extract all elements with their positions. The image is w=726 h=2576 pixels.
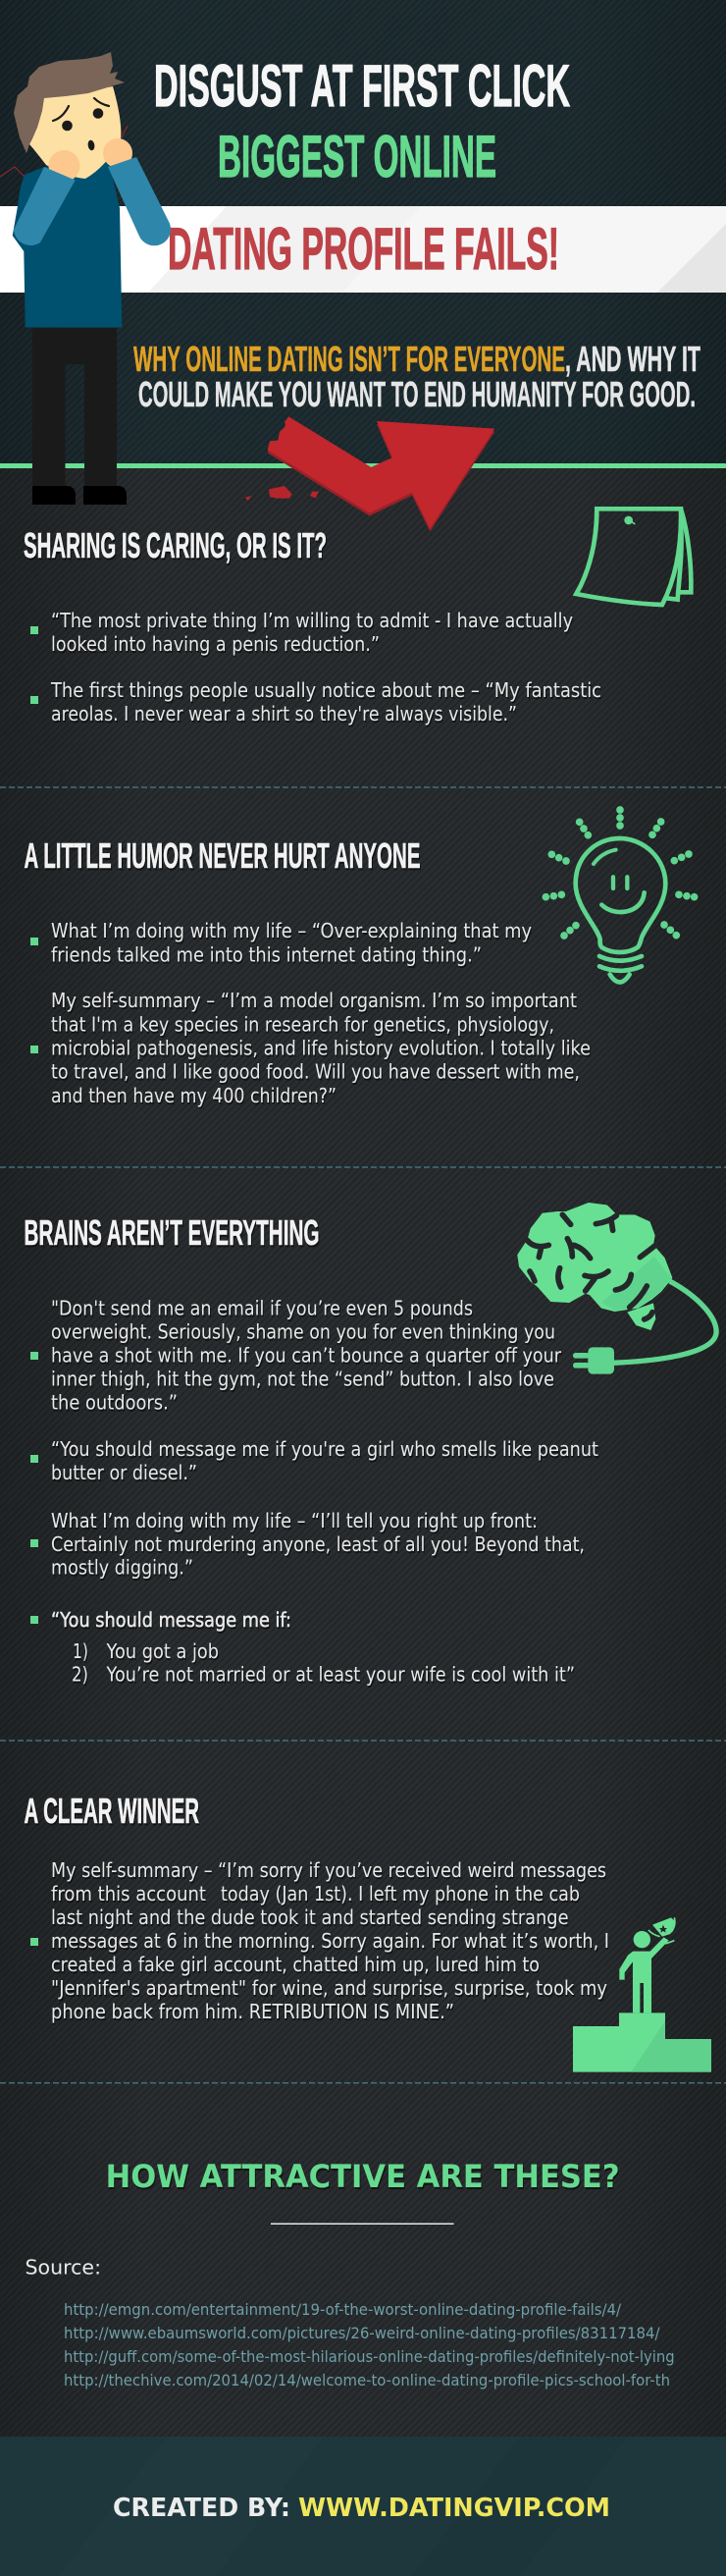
text: section one quotes: looked into having a penis reduction.” xyxy=(51,632,380,656)
text: section three quotes: butter or diesel.” xyxy=(51,1461,197,1484)
man: hands xyxy=(49,138,132,182)
icon: brain with plug xyxy=(518,1204,716,1374)
brain: plug xyxy=(573,1347,614,1374)
man: shoes xyxy=(32,486,127,505)
text: section three quotes: mostly digging.” xyxy=(51,1556,193,1580)
footer credit: CREATED BY: xyxy=(113,2494,290,2523)
man: torso xyxy=(13,157,122,328)
podium xyxy=(573,2012,711,2072)
heading: a little humor: A LITTLE HUMOR NEVER HURT ANYONE xyxy=(24,835,420,876)
trophy star xyxy=(659,1925,667,1933)
text: section one quotes xyxy=(50,609,601,725)
text: section three quotes: the outdoors.” xyxy=(51,1390,178,1414)
text: section three quotes: 2) xyxy=(72,1663,88,1687)
text: section three quotes: 1) xyxy=(73,1639,88,1663)
heading: brains aren't everything: BRAINS AREN’T EVERYTHING xyxy=(24,1212,320,1253)
text: section two quotes: to travel, and I like good food. Will you have dessert with me, xyxy=(51,1060,580,1084)
text: section four quote: My self-summary – “I’m sorry if you’ve received weird messages xyxy=(51,1858,606,1882)
source links: http://emgn.com/entertainment/19-of-the-worst-online-dating-profile-fails/4/ xyxy=(64,2300,622,2319)
text: section four quote: last night and the dude took it and started sending strange xyxy=(51,1905,569,1929)
man: legs xyxy=(32,328,117,486)
source links: http://www.ebaumsworld.com/pictures/26-weird-online-dating-profiles/83117184/ xyxy=(64,2324,660,2342)
figure xyxy=(619,1917,675,2012)
footer credit xyxy=(113,2494,610,2523)
text: section one quotes: areolas. I never wear a shirt so they're always visible.” xyxy=(51,702,517,725)
man: right arm xyxy=(108,157,171,245)
source links: http://guff.com/some-of-the-most-hilarious-online-dating-profiles/definitely-not-lying xyxy=(64,2347,675,2366)
text: section three quotes: inner thigh, hit the gym, not the “send” button. I also love xyxy=(51,1367,554,1390)
white title band xyxy=(0,206,726,293)
text: section three quotes: "Don't send me an email if you’re even 5 pounds xyxy=(51,1297,473,1320)
cta heading: HOW ATTRACTIVE ARE THESE? xyxy=(106,2158,620,2195)
source links xyxy=(64,2300,675,2389)
text: section two quotes: and then have my 400 children?” xyxy=(51,1084,337,1107)
text: section two quotes: friends talked me into this internet dating thing.” xyxy=(51,942,482,966)
man: brows and eyes xyxy=(53,98,109,151)
red arrow xyxy=(245,416,494,531)
text: section one quotes: The first things people usually notice about me – “My fantastic xyxy=(50,678,601,702)
man: left arm xyxy=(14,167,76,245)
source links: http://thechive.com/2014/02/14/welcome-to-online-dating-profile-pics-school-for-th xyxy=(64,2371,670,2389)
text: section three quotes: “You should message me if you're a girl who smells like peanut xyxy=(51,1437,598,1461)
bullets: section one xyxy=(30,626,38,704)
background: body panel xyxy=(0,465,726,2437)
text: section three quotes xyxy=(51,1297,598,1687)
text: section four quote: "Jennifer's apartment" for wine, and surprise, surprise, took my xyxy=(51,1976,607,2000)
heading: sharing is caring: SHARING IS CARING, OR IS IT? xyxy=(24,525,327,565)
text: section three quotes: You got a job xyxy=(106,1639,219,1663)
text: section four quote: phone back from him. RETRIBUTION IS MINE.” xyxy=(51,2000,454,2023)
text: section two quotes: My self-summary – “I’m a model organism. I’m so important xyxy=(51,989,577,1012)
man: face xyxy=(29,86,121,179)
brain: silhouette xyxy=(518,1204,671,1311)
text: section four quote: today (Jan 1st). I left my phone in the cab xyxy=(221,1882,580,1905)
source label: Source: xyxy=(26,2256,101,2280)
text: section four quote: messages at 6 in the morning. Sorry again. For what it’s worth, I xyxy=(51,1929,609,1953)
icon: sticky notes xyxy=(576,509,691,605)
text: section three quotes: Certainly not murdering anyone, least of all you! Beyond that, xyxy=(51,1532,585,1556)
heading: a clear winner: A CLEAR WINNER xyxy=(24,1791,199,1831)
brain: cord xyxy=(611,1281,716,1363)
cartoon man xyxy=(0,52,171,505)
text: section two quotes: What I’m doing with my life – “Over-explaining that my xyxy=(51,919,532,942)
background: header panel xyxy=(0,0,726,465)
text: section two quotes: that I'm a key species in research for genetics, physiology, xyxy=(51,1013,554,1037)
footer credit: WWW.DATINGVIP.COM xyxy=(298,2494,610,2523)
icon: smiling lightbulb xyxy=(542,806,698,982)
green divider line xyxy=(0,463,726,468)
man: hair xyxy=(14,52,125,153)
title line: biggest online: BIGGEST ONLINE xyxy=(218,124,496,189)
rule under heading xyxy=(271,2223,453,2225)
text: section three quotes: “You should message me if: xyxy=(51,1608,291,1632)
text: section three quotes: overweight. Seriously, shame on you for even thinking you xyxy=(51,1320,555,1344)
text: section three quotes: You’re not married or at least your wife is cool with it” xyxy=(106,1663,575,1687)
text: section three quotes: What I’m doing with my life – “I’ll tell you right up front: xyxy=(51,1509,538,1532)
text: section four quote: from this account xyxy=(51,1882,206,1905)
text: section two quotes xyxy=(51,919,591,1107)
subtitle xyxy=(133,339,700,414)
text: section four quote xyxy=(51,1858,609,2023)
text: section three quotes: have a shot with me. If you can’t bounce a quarter off your xyxy=(51,1343,562,1367)
bullets: section three xyxy=(30,1352,38,1624)
text: section one quotes: “The most private thing I’m willing to admit - I have actually xyxy=(51,609,573,632)
brain: folds xyxy=(527,1214,655,1319)
bullets: section two xyxy=(30,938,38,1053)
text: section four quote: created a fake girl account, chatted him up, lured him to xyxy=(51,1953,540,1976)
text: section two quotes: microbial pathogenesis, and life history evolution. I totally like xyxy=(51,1037,591,1060)
icon: winner on podium with trophy xyxy=(573,1917,711,2072)
footer panel xyxy=(0,2437,726,2576)
bullet: section four xyxy=(30,1938,38,1946)
